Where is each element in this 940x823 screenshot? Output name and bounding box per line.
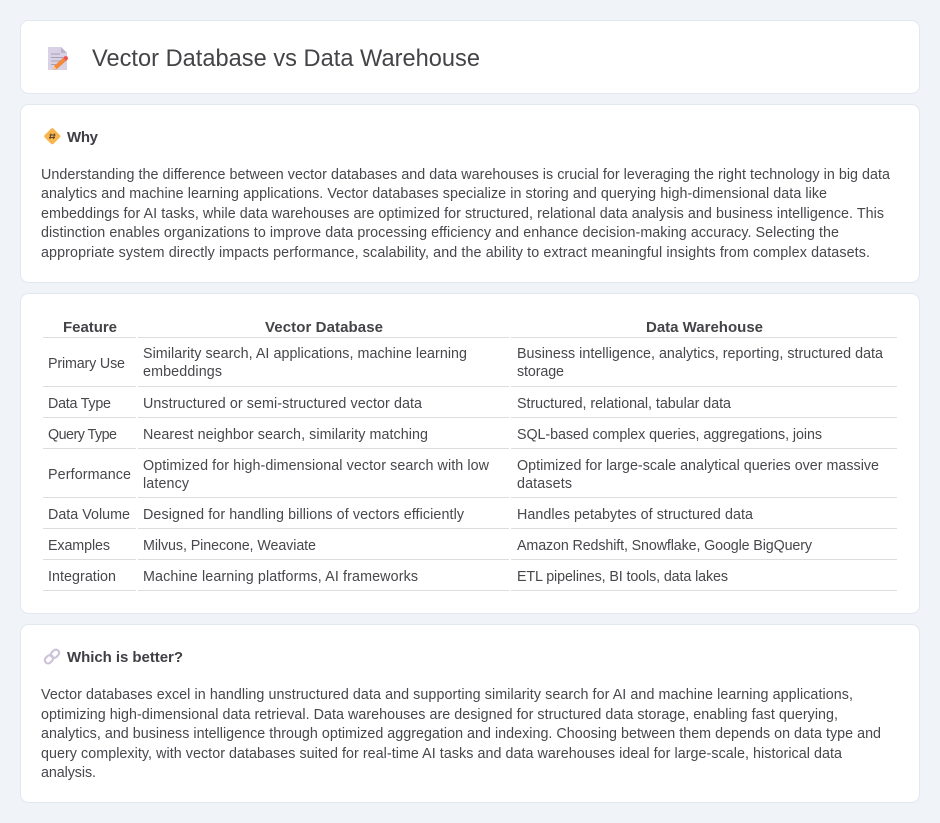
row: data volume: Designed for handling billions of vectors efficiently [143, 507, 465, 523]
panel: why [20, 104, 920, 282]
row: data volume: Handles petabytes of structured data [517, 507, 753, 523]
text block: which is better paragraph: optimizing high-dimensional data retrieval. Data warehouses are designed for structured data storage, enabling fast querying, [41, 707, 838, 723]
table header row: Data Warehouse [646, 319, 763, 336]
row: query type: Query Type [48, 427, 117, 443]
row: performance: Optimized for large-scale analytical queries over massive [517, 458, 879, 474]
text block: why paragraph [41, 167, 890, 261]
row: examples: Milvus, Pinecone, Weaviate [143, 538, 316, 554]
panel: header [20, 20, 920, 94]
panel: comparison table [20, 294, 920, 614]
table header row: Vector Database [265, 319, 383, 336]
row: primary use: embeddings [143, 364, 222, 380]
text block: which is better paragraph: analytics, and business intelligence through optimized aggregation and indexing. Choosing between them depends on data type and [41, 726, 881, 742]
row: query type: SQL-based complex queries, aggregations, joins [517, 427, 822, 443]
row: query type: Nearest neighbor search, similarity matching [143, 427, 428, 443]
panel: which is better [20, 624, 920, 802]
row: data volume: Data Volume [48, 507, 130, 523]
row: primary use: storage [517, 364, 564, 380]
row: data volume [48, 507, 753, 523]
row: data type: Data Type [48, 396, 111, 412]
row: integration: Integration [48, 569, 116, 585]
row: performance: Performance [48, 467, 131, 483]
row: data type [48, 396, 731, 412]
row: performance [48, 458, 879, 492]
row: performance: datasets [517, 476, 572, 492]
text block: why paragraph: Understanding the difference between vector databases and data warehouses is crucial for leveraging the right technology in big data [41, 167, 890, 183]
row: query type [48, 427, 822, 443]
row: primary use: Business intelligence, analytics, reporting, structured data [517, 346, 883, 362]
text block: which is better paragraph: query complexity, with vector databases suited for real-time AI tasks and data warehouses ideal for large-scale, historical data [41, 746, 842, 762]
row: examples: Examples [48, 538, 110, 554]
table header row: Feature [63, 319, 117, 336]
text block: why paragraph: distinction enables organizations to improve data processing efficiency and enhance decision-making accuracy. Selecting the [41, 225, 839, 241]
text block: which is better paragraph: analysis. [41, 765, 96, 781]
table header row [63, 319, 763, 336]
row: performance: latency [143, 476, 190, 492]
row: examples [48, 538, 813, 554]
text block: why paragraph: embeddings for AI tasks, while data warehouses are optimized for structured, relational data analysis and business intelligence. This [41, 206, 884, 222]
text block: which is better paragraph: Vector databases excel in handling unstructured data and supporting similarity search for AI and machine learning applications, [41, 687, 853, 703]
row: primary use: Similarity search, AI applications, machine learning [143, 346, 467, 362]
text block: which is better paragraph [41, 687, 881, 781]
heading: why: Why [67, 129, 99, 146]
row: integration: ETL pipelines, BI tools, data lakes [517, 569, 728, 585]
row: data type: Structured, relational, tabular data [517, 396, 731, 412]
row: primary use [48, 346, 883, 380]
icon: chain link [44, 648, 60, 665]
icon: diamond sign [43, 127, 61, 145]
row: performance: Optimized for high-dimensional vector search with low [143, 458, 490, 474]
row: primary use: Primary Use [48, 356, 125, 372]
row: data type: Unstructured or semi-structured vector data [143, 396, 422, 412]
text block: why paragraph: appropriate system directly impacts performance, scalability, and the ability to extract meaningful insights from complex datasets. [41, 245, 870, 261]
icon: document with pencil [48, 47, 68, 70]
heading: which is better: Which is better? [67, 649, 183, 666]
row: examples: Amazon Redshift, Snowflake, Google BigQuery [517, 538, 813, 554]
row: integration: Machine learning platforms, AI frameworks [143, 569, 418, 585]
row: integration [48, 569, 728, 585]
title: Vector Database vs Data Warehouse [92, 46, 480, 72]
text block: why paragraph: analytics and machine learning applications. Vector databases specialize in storing and querying high-dimensional data like [41, 186, 827, 202]
